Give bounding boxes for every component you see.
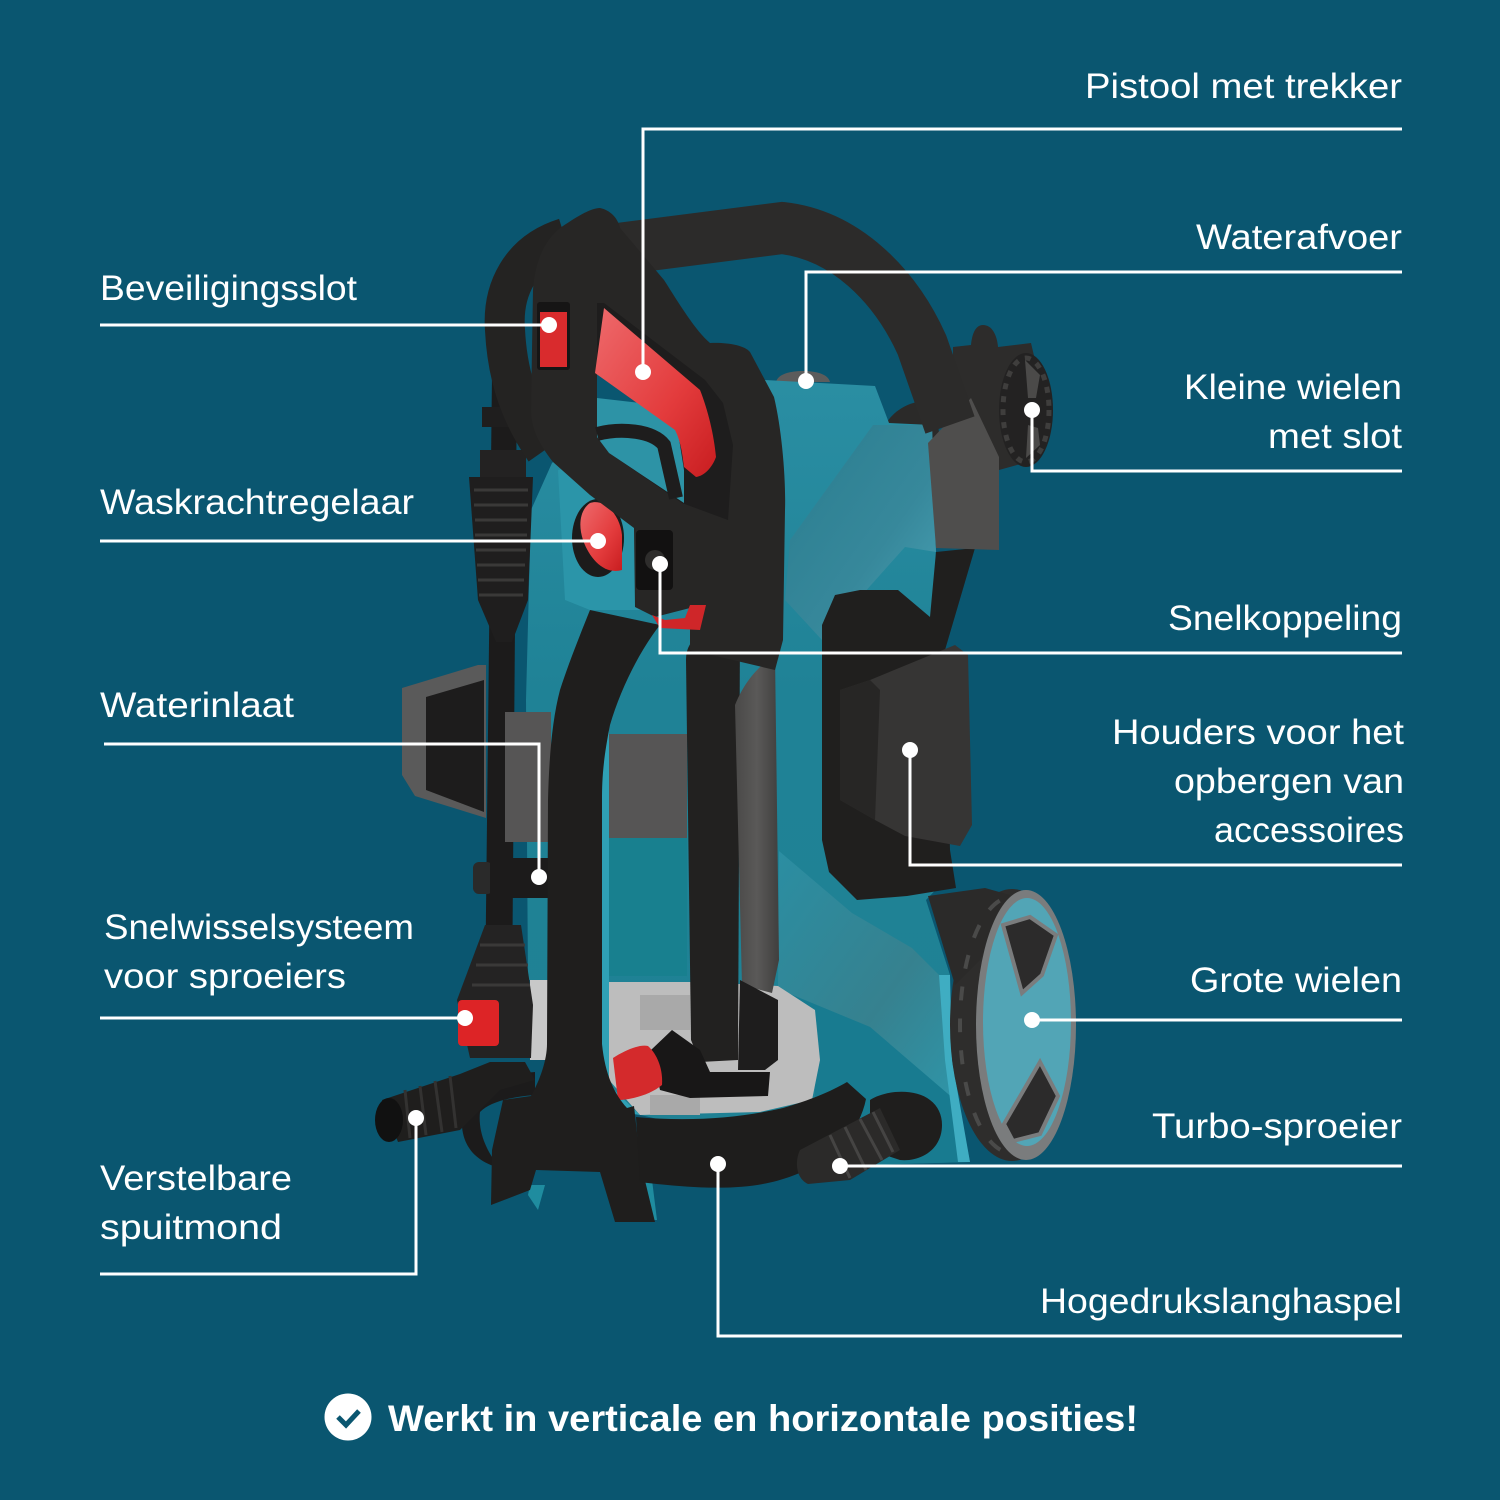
- grey panel: [609, 734, 687, 838]
- icon: check mark: [324, 1394, 372, 1440]
- label: Houders voor het opbergen van accessoires: opbergen van: [1174, 762, 1404, 801]
- pressure washer illustration: [375, 208, 1076, 1222]
- label: Kleine wielen met slot: met slot: [1268, 417, 1402, 456]
- red trigger: [595, 308, 716, 477]
- central hose and grey strip: [651, 630, 779, 1098]
- leader: Kleine wielen: [1024, 402, 1402, 471]
- accessory holder backing: [822, 548, 975, 900]
- rim: [976, 890, 1076, 1160]
- teal inner edge: [602, 720, 640, 1115]
- foot and front leg: [491, 610, 660, 1222]
- label: Snelkoppeling: Snelkoppeling: [1168, 599, 1402, 638]
- leader: Snelkoppeling: [652, 556, 1402, 653]
- label: Snelwisselsysteem voor sproeiers: [104, 908, 414, 996]
- leader: Turbo-sproeier: [832, 1158, 1402, 1174]
- bright body edge: [939, 975, 970, 1162]
- hub: [983, 898, 1071, 1146]
- lower body crease zone: [778, 851, 955, 1100]
- label: Verstelbare spuitmond: Verstelbare: [100, 1159, 292, 1198]
- label: Kleine wielen met slot: Kleine wielen: [1184, 368, 1402, 407]
- spray gun body: [531, 208, 785, 670]
- water inlet holder panel: [402, 665, 486, 818]
- high pressure hose reel arc: [636, 1082, 866, 1188]
- teal main body: [526, 380, 970, 1165]
- small wheel housing and wheel: [953, 325, 1053, 470]
- upper window: [1003, 917, 1056, 993]
- label: Waskrachtregelaar: Waskrachtregelaar: [100, 483, 414, 522]
- leader: Houders: [902, 742, 1402, 865]
- turbo nozzle: [797, 1092, 942, 1184]
- gun opening: [597, 303, 733, 520]
- dark arch: [597, 431, 676, 498]
- label: Turbo-sproeier: Turbo-sproeier: [1152, 1107, 1402, 1146]
- leader: Snelwisselsysteem: [100, 1010, 473, 1026]
- large wheel: [928, 888, 1076, 1161]
- carrying handle tube: [610, 228, 950, 425]
- lower body dark zone: [778, 989, 970, 1165]
- leader: Beveiligingsslot: [100, 317, 557, 333]
- teal behind trigger: [597, 398, 684, 503]
- leader lines and dots: [100, 129, 1402, 1336]
- leader: Grote wielen: [1024, 1012, 1402, 1028]
- red cap: [613, 1046, 662, 1100]
- label: Verstelbare spuitmond: [100, 1159, 292, 1247]
- label: Verstelbare spuitmond: spuitmond: [100, 1208, 282, 1247]
- label: Houders voor het opbergen van accessoires: Houders voor het: [1112, 713, 1404, 752]
- leader: Pistool met trekker: [635, 129, 1402, 380]
- accessory holder lid: [840, 645, 972, 846]
- label: Houders voor het opbergen van accessoires: accessoires: [1214, 811, 1404, 850]
- leader: Hogedrukslanghaspel: [710, 1156, 1402, 1336]
- leader: Waskrachtregelaar: [100, 533, 606, 549]
- foot teal bits: [528, 1180, 657, 1220]
- label: Pistool met trekker: Pistool met trekker: [1085, 67, 1402, 106]
- leader: Waterafvoer: [798, 272, 1402, 389]
- label: Grote wielen: Grote wielen: [1190, 961, 1402, 1000]
- pressure chamber: [558, 450, 690, 610]
- tyre: [950, 889, 1074, 1161]
- label: Houders voor het opbergen van accessoires: [1112, 713, 1404, 850]
- rear disc behind bracket: [885, 401, 940, 440]
- label: Hogedrukslanghaspel: Hogedrukslanghaspel: [1040, 1282, 1402, 1321]
- tyre tread: [960, 897, 1064, 1153]
- foam base: [609, 982, 820, 1115]
- label: Snelwisselsysteem voor sproeiers: voor sproeiers: [104, 957, 346, 996]
- label: Waterafvoer: Waterafvoer: [1196, 218, 1402, 257]
- background gap behind trigger: [597, 372, 640, 405]
- adjustable nozzle: [375, 1062, 535, 1142]
- water drain cap: [776, 371, 830, 382]
- water inlet connector: [473, 858, 550, 898]
- quick coupling: [636, 530, 673, 590]
- label: Beveiligingsslot: Beveiligingsslot: [100, 269, 357, 308]
- teal channel: [609, 838, 687, 976]
- leader: Waterinlaat: [104, 744, 547, 885]
- lower window: [1004, 1062, 1058, 1141]
- pressure regulator dial: [572, 499, 624, 577]
- red release clip: [652, 605, 706, 630]
- label: Waterinlaat: Waterinlaat: [100, 686, 294, 725]
- footer statement: Werkt in verticale en horizontale posities!: [388, 1398, 1138, 1439]
- label: Snelwisselsysteem voor sproeiers: Snelwisselsysteem: [104, 908, 414, 947]
- red quick-change button: [458, 1000, 499, 1046]
- lance rod: [485, 375, 517, 1000]
- label: Kleine wielen met slot: [1184, 368, 1402, 456]
- upper body facet: [785, 425, 936, 640]
- grey mounting bracket: [928, 398, 999, 550]
- leader: Verstelbare spuitmond: [100, 1110, 424, 1274]
- rear handle tube: [505, 238, 565, 450]
- wheel cover: [928, 888, 1010, 985]
- rear hose reel loop: [462, 1072, 535, 1168]
- side silver strip: [530, 980, 548, 1060]
- safety lock: [537, 302, 570, 370]
- left grey holder: [505, 712, 551, 842]
- lance grip and coupling: [457, 407, 533, 1058]
